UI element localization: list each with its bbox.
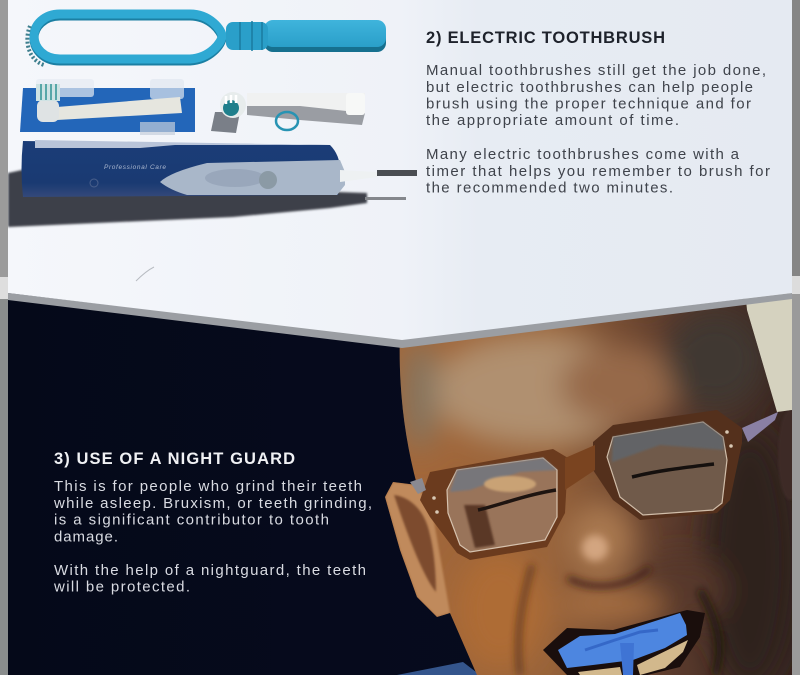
text block: section 2: timer that helps you remember to brush for [426, 163, 770, 180]
photo: toothbrush parts [8, 14, 417, 281]
icon: electric toothbrush: Professional Care [104, 164, 166, 171]
text block: section 3: will be protected. [53, 578, 190, 596]
text block: section 3: With the help of a nightguard, the teeth [54, 562, 366, 579]
text block: section 2: Many electric toothbrushes come with a [426, 146, 740, 163]
text block: section 3: is a significant contributor to tooth [54, 512, 329, 528]
heading: night guard: 3) USE OF A NIGHT GUARD [54, 450, 295, 468]
icon: spare brush head and ring [211, 92, 365, 133]
text block: section 2: Manual toothbrushes still get the job done, [426, 62, 766, 79]
panel: electric toothbrush light background [8, 0, 792, 340]
hinges and temple [432, 496, 436, 500]
icon: packaged brush head [20, 79, 195, 135]
text block: section 3: while asleep. Bruxism, or teeth grinding, [53, 495, 372, 512]
ear [385, 482, 450, 617]
heading: electric toothbrush: 2) ELECTRIC TOOTHBRUSH [426, 29, 665, 47]
panel shadow edge [8, 293, 792, 348]
head [380, 290, 800, 675]
right lens [607, 422, 727, 515]
text block: section 3 [53, 450, 372, 596]
cast shadow of toothbrush [8, 170, 367, 227]
wall behind head [740, 290, 792, 412]
nose highlight and creases [518, 535, 719, 675]
scuff mark [136, 267, 154, 281]
bridge [565, 445, 595, 490]
right ear [778, 410, 792, 499]
glasses [410, 410, 778, 560]
text block: section 3: This is for people who grind their teeth [54, 478, 362, 495]
left frame [420, 449, 568, 560]
text block: section 2: brush using the proper technique and for [426, 96, 751, 112]
text block: section 2 [426, 29, 770, 196]
shirt [397, 662, 480, 675]
icon: blue tongue scraper [27, 14, 386, 65]
text block: section 2: the appropriate amount of time. [426, 112, 679, 129]
right frame [593, 410, 742, 520]
panel: night guard dark background [8, 290, 792, 675]
icon: electric toothbrush [22, 140, 417, 197]
text block: section 2: the recommended two minutes. [426, 180, 673, 196]
skin shading [402, 310, 795, 675]
left lens [447, 458, 557, 552]
photo: man wearing a night guard [380, 290, 800, 675]
text block: section 2: but electric toothbrushes can help people [426, 79, 753, 96]
text block: section 3: damage. [54, 528, 118, 546]
mouth and blue night guard [543, 610, 705, 675]
